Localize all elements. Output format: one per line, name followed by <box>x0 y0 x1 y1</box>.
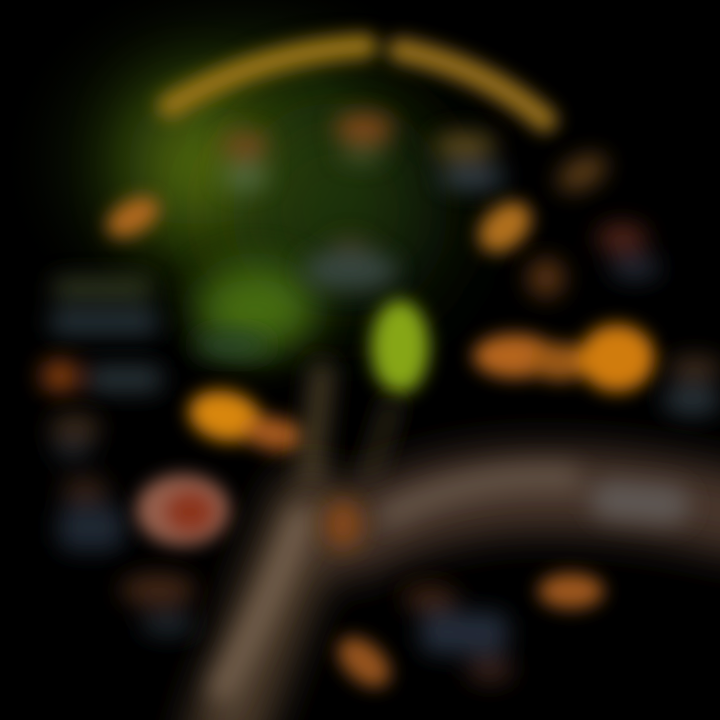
bright green leaf <box>371 300 429 394</box>
orange fruit row <box>473 324 655 392</box>
bottom orange leaf <box>328 627 400 697</box>
right edge label <box>662 356 720 416</box>
central green label <box>194 333 270 357</box>
background green glow <box>0 0 485 360</box>
leaf: far right small <box>551 147 613 199</box>
red fruit <box>136 474 230 546</box>
lower right orange leaf <box>538 573 604 609</box>
right label cluster <box>527 223 661 298</box>
lower left label <box>120 574 196 636</box>
left lower labels <box>49 414 124 551</box>
tree branch <box>225 490 720 720</box>
branch stems <box>310 372 392 480</box>
leaf: upper left orange <box>99 188 167 246</box>
central label <box>302 237 398 290</box>
orange leaf centre left <box>184 384 309 456</box>
branch highlights <box>222 477 670 690</box>
left small icon and label <box>41 360 162 392</box>
lower centre label <box>402 585 514 684</box>
branch knot orange <box>325 500 361 548</box>
title arc <box>170 46 545 120</box>
left label block <box>50 278 158 334</box>
top row labels <box>221 113 506 189</box>
leaf: upper right orange <box>469 191 541 263</box>
